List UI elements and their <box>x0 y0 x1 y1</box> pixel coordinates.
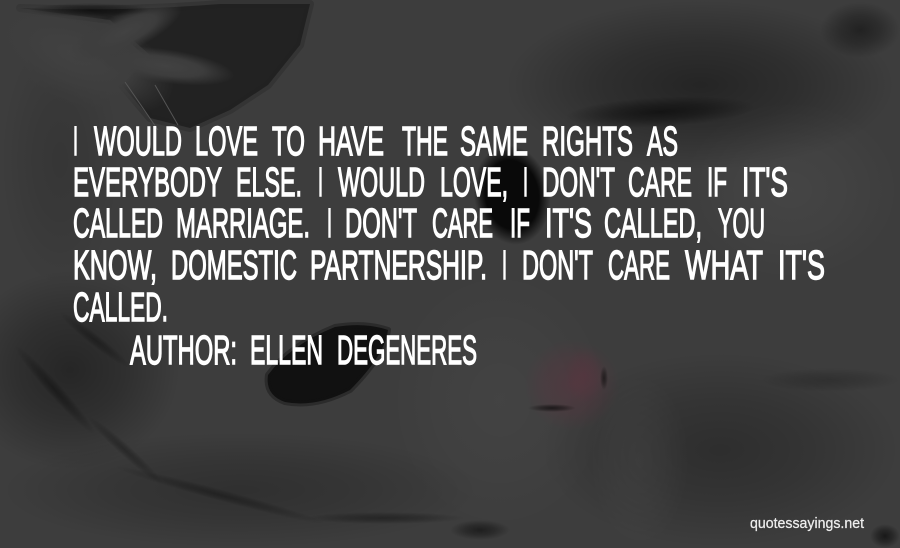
quote line 4: IT'S <box>778 242 825 288</box>
eye: left cat eye <box>268 325 388 404</box>
watermark: quotessayings.net <box>750 516 864 532</box>
quote line 2: WOULD <box>338 159 425 205</box>
quote line 2: IF <box>707 159 727 205</box>
quote line 2: ELSE. <box>236 159 302 205</box>
quote line 3: IF <box>510 200 530 246</box>
ear: dark inner ear with fingers <box>0 0 310 139</box>
quote line 2: I <box>523 159 528 205</box>
quote line 1: HAVE <box>318 118 384 164</box>
author attribution <box>130 327 477 373</box>
quote line 3: CARE <box>432 200 493 246</box>
quote line 4: PARTNERSHIP. <box>310 242 487 288</box>
quote line 5: CALLED. <box>73 284 168 330</box>
quote line 1: TO <box>272 118 305 164</box>
eye: right cat eye <box>466 139 558 251</box>
quote line 1: AS <box>647 118 678 164</box>
quote line 1: LOVE <box>195 118 258 164</box>
quote line 1: THE <box>402 118 448 164</box>
quote line 2 <box>73 159 788 205</box>
quote line 3: YOU <box>718 200 765 246</box>
author attribution: DEGENERES <box>337 327 477 373</box>
quote line 4: KNOW, <box>73 242 157 288</box>
quote line 2: CARE <box>628 159 692 205</box>
quote text <box>73 118 825 330</box>
quote line 2: DON'T <box>542 159 615 205</box>
author attribution: ELLEN <box>250 327 323 373</box>
icon: pink cat nose <box>524 339 620 431</box>
quote line 4: DON'T <box>522 242 593 288</box>
whisker shadows on left <box>10 308 166 488</box>
author attribution: AUTHOR: <box>130 327 237 373</box>
quote line 4 <box>73 242 825 288</box>
quote line 3 <box>73 200 765 246</box>
quote line 2: I <box>318 159 323 205</box>
quote line 3: DON'T <box>345 200 417 246</box>
quote line 1: I <box>73 118 78 164</box>
quote line 1: RIGHTS <box>542 118 633 164</box>
quote line 4: WHAT <box>685 242 763 288</box>
quote line 3: CALLED, <box>604 200 702 246</box>
quote line 4: DOMESTIC <box>171 242 297 288</box>
quote line 3: MARRIAGE. <box>176 200 310 246</box>
chin shadow line <box>112 461 510 540</box>
quote line 4: I <box>502 242 507 288</box>
quote line 3: IT'S <box>545 200 592 246</box>
quote line 2: IT'S <box>742 159 788 205</box>
quote line 1: WOULD <box>94 118 182 164</box>
quote line 3: CALLED <box>73 200 163 246</box>
quote line 1: SAME <box>460 118 528 164</box>
quote line 2: EVERYBODY <box>73 159 222 205</box>
quote line 3: I <box>327 200 332 246</box>
quote line 2: LOVE, <box>440 159 508 205</box>
quote line 4: CARE <box>608 242 670 288</box>
quote line 1 <box>73 118 678 164</box>
